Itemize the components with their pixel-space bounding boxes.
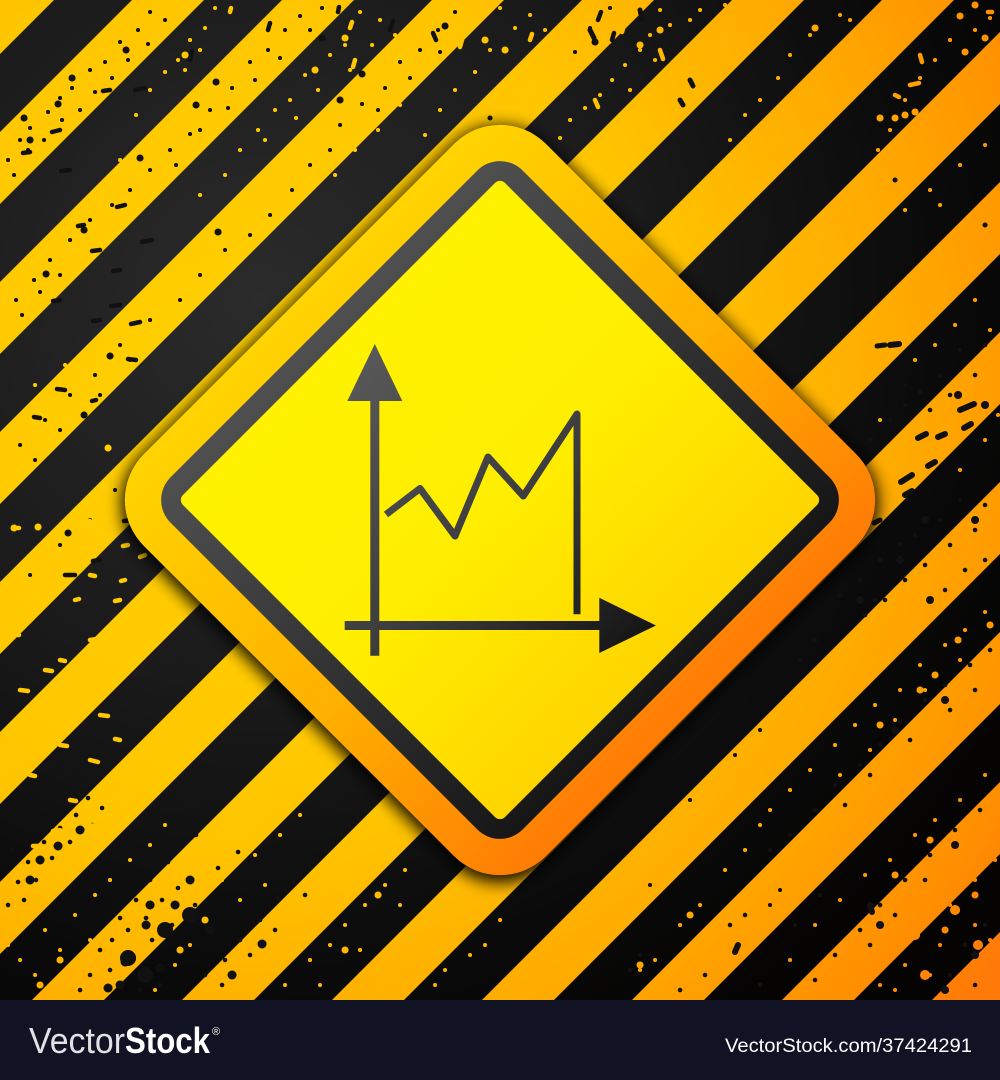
image id text: VectorStock.com/37424291	[725, 1036, 972, 1057]
sign outer orange rim	[98, 98, 902, 902]
VectorStock logo	[29, 1020, 220, 1061]
splatter: bottom and right on black stripes	[8, 612, 995, 990]
VectorStock logo: Vector	[29, 1020, 125, 1061]
sign dark ring	[148, 148, 852, 852]
x axis arrow	[345, 598, 656, 653]
splatter: right side clusters	[680, 345, 990, 990]
footer bar	[0, 1000, 1000, 1080]
y axis arrow	[347, 344, 402, 656]
sign drop shadow	[98, 102, 902, 906]
VectorStock logo: ®	[212, 1026, 220, 1038]
VectorStock logo: Stock	[125, 1020, 211, 1061]
sign yellow face	[178, 178, 822, 822]
icon: line chart with axes	[345, 344, 656, 656]
splatter: bottom-left cluster	[8, 798, 345, 990]
warning sign	[98, 98, 902, 906]
splatter: blots near sign	[490, 10, 985, 523]
data line	[386, 414, 577, 614]
